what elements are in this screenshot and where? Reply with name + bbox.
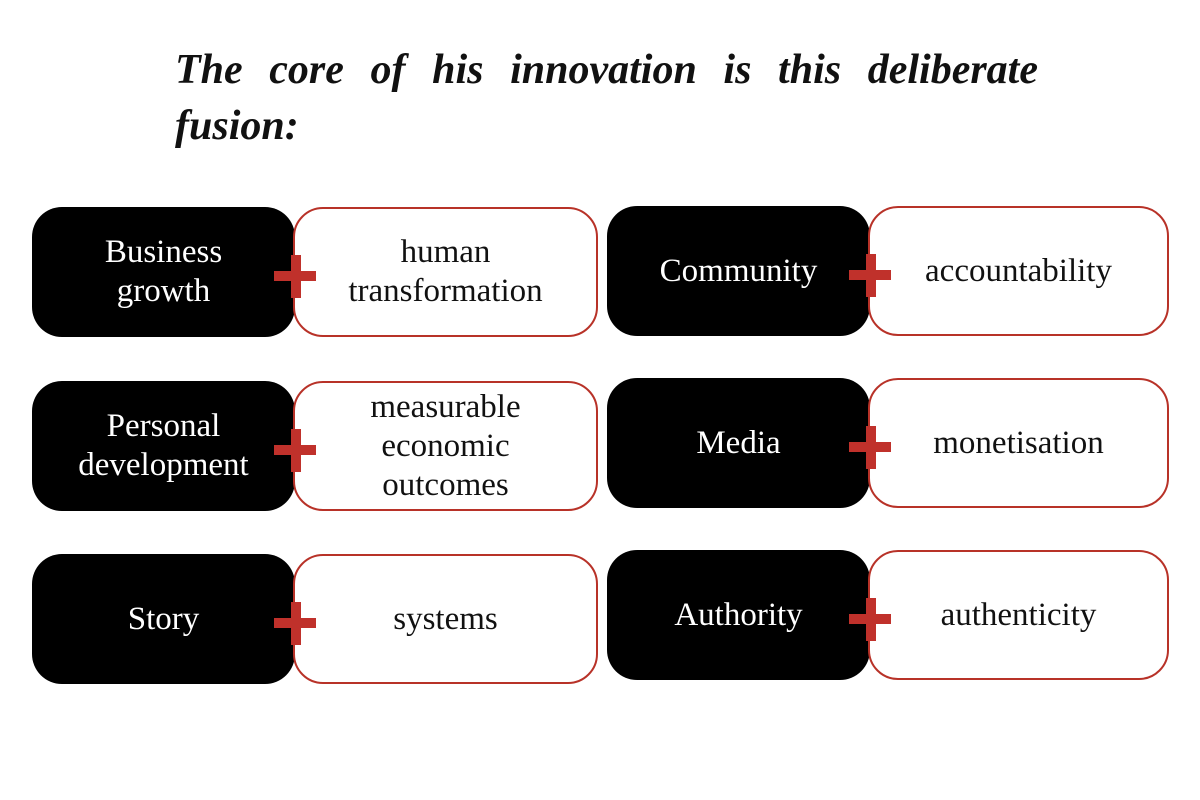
black box: development [78,447,249,483]
black box [32,381,295,511]
white box: economic [381,428,510,464]
white box: human [401,234,490,270]
black box [607,206,870,336]
white box: authenticity [941,596,1096,632]
title: The core of his innovation is this deliberate fusion: [175,47,1038,149]
black box: Personal [107,408,220,444]
white box [868,550,1169,680]
white box [293,381,598,511]
black box: Media [696,424,781,460]
pair: business growth + human transformation [32,207,598,337]
icon: plus [849,426,891,469]
black box: growth [117,273,210,309]
white box: monetisation [933,424,1104,460]
white box: transformation [348,273,543,309]
white box: outcomes [382,466,509,502]
icon: plus [849,254,891,297]
white box [868,378,1169,508]
black box [32,207,295,337]
icon: plus [849,598,891,641]
black box [607,550,870,680]
white box: systems [393,600,498,636]
black box: Authority [674,596,803,632]
pair: authority + authenticity [607,550,1169,680]
pair: story + systems [32,554,598,684]
black box: Story [128,600,199,636]
pair: personal development + measurable economic outcomes [32,381,598,511]
icon: plus [274,255,316,298]
icon: plus [274,602,316,645]
white box: accountability [925,252,1112,288]
icon: plus [274,429,316,472]
white box [868,206,1169,336]
black box [32,554,295,684]
black box: Community [660,252,817,288]
white box [293,207,598,337]
white box: measurable [370,388,521,424]
black box: Business [105,234,222,270]
white box [293,554,598,684]
pair: media + monetisation [607,378,1169,508]
pair: community + accountability [607,206,1169,336]
black box [607,378,870,508]
